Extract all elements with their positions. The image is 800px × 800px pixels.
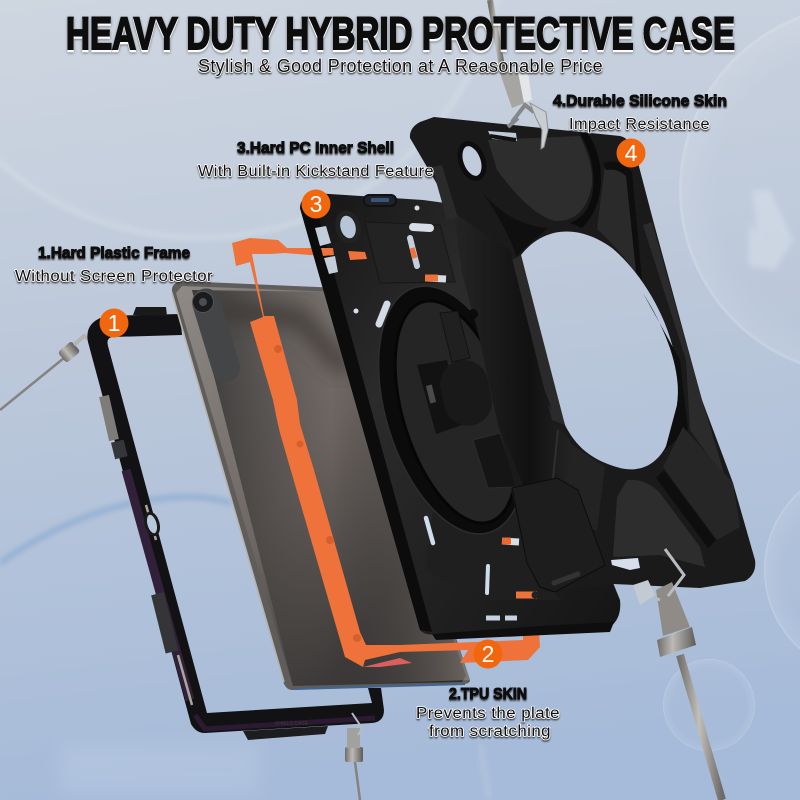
bottom-right rope and clip [633,549,722,800]
label 2: TPU skin: from scratching [429,723,551,740]
label 1: hard plastic frame [15,245,213,285]
label 2: TPU skin [416,686,560,740]
left rope and connector [0,336,90,410]
badge 1 [100,308,128,338]
part 1: hard plastic frame [87,307,384,740]
label 4: durable silicone skin [553,93,727,133]
label 4: durable silicone skin: Impact Resistance [569,116,710,133]
label 4: durable silicone skin: 4.Durable Silicone Skin [553,93,727,110]
part 3: hard PC inner shell [300,193,620,640]
label 3: hard PC inner shell: 3.Hard PC Inner Shell [237,140,394,157]
label 2: TPU skin: Prevents the plate [416,705,560,722]
shell cut-outs [315,206,538,618]
tablet [172,281,470,690]
label 3: hard PC inner shell [198,140,434,180]
part 1: hard plastic frame: SHIELD CASE [275,721,309,727]
subtitle: Stylish & Good Protection at A Reasonable Price [198,56,603,76]
label 1: hard plastic frame: Without Screen Protector [15,268,213,285]
badge 4 [616,138,646,168]
label 2: TPU skin: 2.TPU SKIN [449,686,527,703]
part 2: orange TPU skin [232,238,540,667]
case panels [468,132,740,592]
case cut-outs [432,131,640,570]
badge 2: 2 [482,641,494,667]
badge 4: 4 [625,140,638,166]
top rope and clip [490,0,548,149]
label 1: hard plastic frame: 1.Hard Plastic Frame [38,245,190,262]
badge 1: 1 [108,310,120,336]
part 4: durable silicone skin [410,117,755,592]
rotating hand strap ring [351,268,553,552]
badge 3: 3 [310,191,322,217]
visible inner shell through window [508,255,565,425]
badge 2 [474,640,502,668]
label 3: hard PC inner shell: With Built-in Kickstand Feature [198,163,434,180]
badge 3 [302,190,330,218]
bottom rope and clip [345,713,363,800]
